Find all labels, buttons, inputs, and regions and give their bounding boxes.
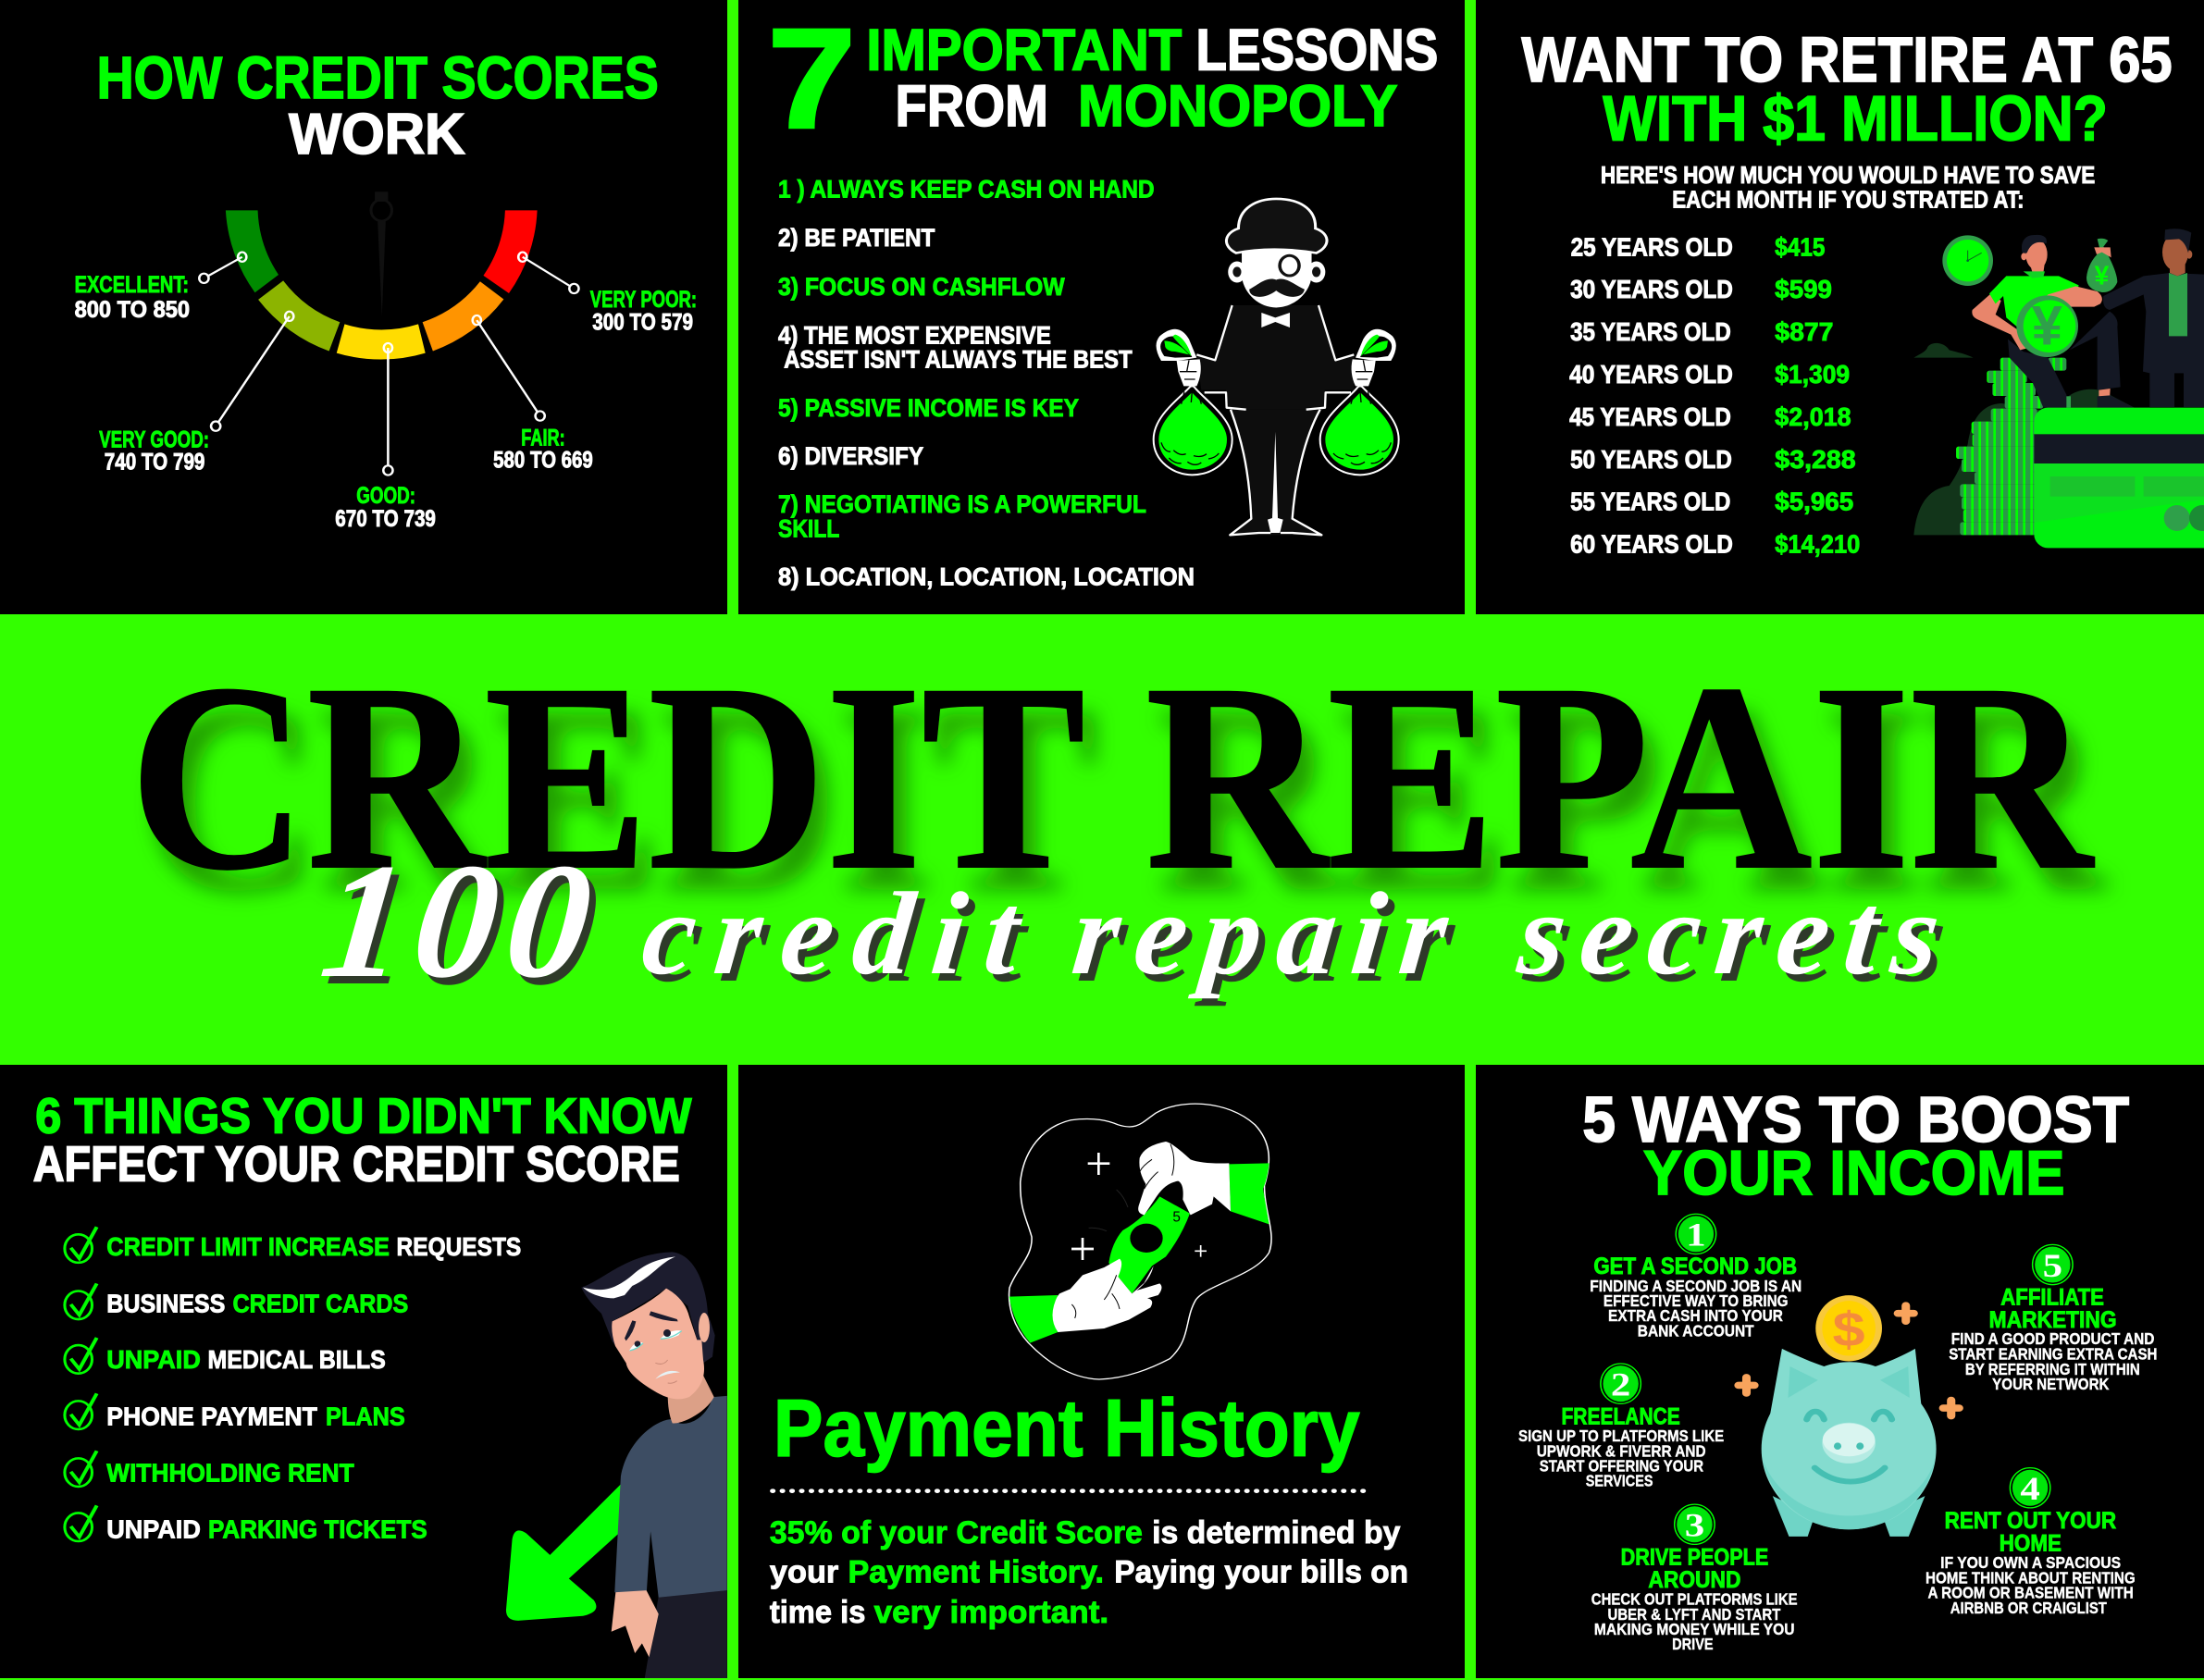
list: six items: UNPAID xyxy=(106,1346,201,1374)
list: six items: CREDIT LIMIT INCREASE xyxy=(106,1233,390,1262)
heading: 6 things you didn't know xyxy=(33,1087,692,1192)
subtitle: 100 credit repair secrets: secrets xyxy=(1518,875,1952,1007)
label: very poor xyxy=(590,286,697,335)
item 3: drive people around: DRIVE PEOPLE xyxy=(1621,1545,1768,1570)
icon: hands exchanging money xyxy=(1009,1142,1269,1343)
table: savings by starting age: 55 YEARS OLD xyxy=(1570,488,1730,516)
table: savings by starting age: $14,210 xyxy=(1775,531,1860,559)
label: good: GOOD: xyxy=(356,482,415,508)
heading: 7 important lessons from monopoly xyxy=(768,0,1438,157)
item 1: get a second job xyxy=(1590,1214,1802,1340)
label: fair: FAIR: xyxy=(521,425,565,451)
panel: payment history xyxy=(770,1104,1408,1629)
left man: ¥ xyxy=(2032,295,2063,357)
table: savings by starting age: $3,288 xyxy=(1775,446,1856,474)
heading: 7 important lessons from monopoly: MONOPOLY xyxy=(1078,73,1397,139)
yen coin xyxy=(2016,295,2078,357)
item 1: get a second job: 1 xyxy=(1686,1217,1706,1254)
sparkle plus signs xyxy=(1071,1153,1109,1260)
list: lessons: 3) FOCUS ON CASHFLOW xyxy=(778,274,1065,302)
background hills xyxy=(1913,343,2135,535)
gauge needle xyxy=(371,191,391,316)
list: lessons xyxy=(778,177,1195,591)
text block: time is xyxy=(770,1594,865,1629)
item 3: drive people around: CHECK OUT PLATFORMS LIKE xyxy=(1591,1590,1798,1609)
subtitle: 100 credit repair secrets: repair xyxy=(1067,868,1455,999)
banner: credit repair xyxy=(0,614,2204,1065)
orange plus signs xyxy=(1739,1305,1959,1416)
icon: sad man's head xyxy=(581,1252,715,1423)
item 3: drive people around: MAKING MONEY WHILE YOU xyxy=(1594,1621,1795,1639)
list: six items: WITHHOLDING RENT xyxy=(106,1459,354,1488)
panel: retire at 65 xyxy=(1522,24,2204,559)
item 4: rent out your home: RENT OUT YOUR xyxy=(1945,1508,2116,1533)
icon: hands exchanging money: 5 xyxy=(1172,1210,1181,1226)
item 4: rent out your home xyxy=(1925,1468,2136,1618)
item 4: rent out your home: IF YOU OWN A SPACIOUS xyxy=(1940,1553,2121,1572)
list: six items: PHONE PAYMENT xyxy=(106,1402,317,1431)
subheading xyxy=(1601,162,2095,213)
arrow: pointing down-left xyxy=(506,1484,623,1621)
heading: 7 important lessons from monopoly: IMPORTANT xyxy=(866,17,1182,82)
label: fair xyxy=(493,425,593,473)
heading: 5 ways to boost your income: YOUR INCOME xyxy=(1643,1137,2064,1208)
icon: piggy bank xyxy=(1739,1295,1959,1537)
table: savings by starting age: 45 YEARS OLD xyxy=(1569,403,1731,431)
list: six items: CREDIT CARDS xyxy=(233,1290,408,1318)
item 2: freelance xyxy=(1518,1364,1724,1490)
item 5: affiliate marketing xyxy=(1949,1244,2157,1394)
table: savings by starting age: 50 YEARS OLD xyxy=(1570,446,1732,474)
subtitle: 100 credit repair secrets: 100 xyxy=(314,829,600,1012)
label: very poor: 300 TO 579 xyxy=(592,309,693,335)
label: good: 670 TO 739 xyxy=(335,505,436,532)
heading: 7 important lessons from monopoly: LESSONS xyxy=(1196,17,1438,82)
text block: your xyxy=(770,1554,839,1589)
list: six items: REQUESTS xyxy=(397,1233,521,1262)
list: lessons: 7) NEGOTIATING IS A POWERFUL xyxy=(778,492,1146,519)
subtitle: 100 credit repair secrets: 100 xyxy=(320,836,606,1019)
item 2: freelance: SIGN UP TO PLATFORMS LIKE xyxy=(1518,1427,1724,1446)
table: savings by starting age: $415 xyxy=(1775,234,1825,262)
label: fair: 580 TO 669 xyxy=(493,447,593,473)
man's body xyxy=(612,1396,727,1680)
item 5: affiliate marketing: 5 xyxy=(2043,1247,2062,1284)
heading: 6 things you didn't know: 6 THINGS YOU DIDN'T KNOW xyxy=(35,1087,692,1143)
item 4: rent out your home: HOME xyxy=(2000,1531,2062,1556)
table: savings by starting age: $1,309 xyxy=(1775,361,1850,389)
text block: Paying your bills on xyxy=(1114,1554,1408,1589)
label: good xyxy=(335,482,436,532)
list: lessons: 6) DIVERSIFY xyxy=(778,443,923,470)
item 3: drive people around: DRIVE xyxy=(1672,1635,1714,1653)
panel: things that affect your credit score xyxy=(33,1087,727,1680)
left bag xyxy=(1157,329,1229,472)
text block: Payment History. xyxy=(848,1554,1104,1589)
trousers xyxy=(1229,410,1321,535)
item 1: get a second job: FINDING A SECOND JOB IS AN xyxy=(1590,1277,1802,1295)
gold coin: $ xyxy=(1833,1303,1865,1357)
left man xyxy=(1972,235,2135,408)
panel: how credit scores work xyxy=(75,44,697,532)
jacket xyxy=(1196,305,1354,410)
text block: very important. xyxy=(874,1594,1108,1629)
coin stacks xyxy=(1956,358,2066,535)
list: lessons: 4) THE MOST EXPENSIVE xyxy=(778,323,1051,350)
panel: ways to boost income xyxy=(1518,1084,2157,1653)
item 5: affiliate marketing: MARKETING xyxy=(1989,1307,2117,1332)
right man xyxy=(2103,229,2204,407)
label: very good xyxy=(99,426,209,475)
item 4: rent out your home: 4 xyxy=(2020,1470,2040,1507)
money bag: ¥ xyxy=(2094,261,2109,290)
item 5: affiliate marketing: YOUR NETWORK xyxy=(1992,1376,2109,1394)
label: very good: VERY GOOD: xyxy=(99,426,209,452)
list: lessons: 2) BE PATIENT xyxy=(778,226,935,253)
list: six items: PLANS xyxy=(326,1402,405,1431)
credit card xyxy=(2034,408,2204,548)
list: six items xyxy=(106,1233,521,1544)
chart: credit score gauge xyxy=(199,191,579,476)
list: six items: UNPAID xyxy=(106,1515,201,1544)
item 4: rent out your home: AIRBNB OR CRAIGLIST xyxy=(1950,1600,2107,1618)
head and hat xyxy=(1226,199,1327,307)
bow tie xyxy=(1261,313,1290,327)
list: lessons: 5) PASSIVE INCOME IS KEY xyxy=(778,395,1079,422)
list: six items: BUSINESS xyxy=(106,1290,225,1318)
table: savings by starting age: $599 xyxy=(1775,276,1832,303)
heading: 5 ways to boost your income xyxy=(1582,1084,2129,1208)
clock xyxy=(1942,235,1993,286)
label: very poor: VERY POOR: xyxy=(590,286,697,312)
text block: 35% of your Credit Score xyxy=(770,1514,1143,1550)
item 5: affiliate marketing: BY REFERRING IT WITHIN xyxy=(1965,1360,2140,1378)
title: how credit scores work xyxy=(97,44,659,166)
subtitle: 100 credit repair secrets: credit xyxy=(637,868,1028,999)
table: savings by starting age: $2,018 xyxy=(1775,403,1851,431)
subtitle: 100 credit repair secrets xyxy=(314,829,1952,1019)
subtitle: 100 credit repair secrets: credit xyxy=(643,875,1034,1007)
item 3: drive people around: 3 xyxy=(1685,1507,1704,1544)
table: savings by starting age: $877 xyxy=(1775,318,1833,346)
icon: monopoly man with money bags xyxy=(1157,199,1396,535)
subtitle: 100 credit repair secrets: secrets xyxy=(1512,868,1946,999)
panel: monopoly lessons xyxy=(768,0,1438,591)
subheading: EACH MONTH IF YOU STRATED AT: xyxy=(1672,186,2024,213)
money bag xyxy=(2086,239,2117,292)
item 3: drive people around xyxy=(1591,1504,1798,1653)
table: savings by starting age: 35 YEARS OLD xyxy=(1570,318,1731,346)
title: how credit scores work: WORK xyxy=(289,101,465,166)
label: excellent: EXCELLENT: xyxy=(75,272,189,298)
gold coin xyxy=(1815,1295,1882,1361)
right bag xyxy=(1323,329,1396,472)
item 1: get a second job: EXTRA CASH INTO YOUR xyxy=(1608,1307,1783,1326)
table: savings by starting age: 60 YEARS OLD xyxy=(1570,531,1733,559)
icon: men on coin stacks and credit card xyxy=(1913,229,2204,548)
heading: 6 things you didn't know: AFFECT YOUR CREDIT SCORE xyxy=(33,1136,680,1192)
item 2: freelance: START OFFERING YOUR xyxy=(1540,1457,1703,1476)
heading: want to retire at 65 xyxy=(1522,24,2173,154)
label: excellent xyxy=(75,272,190,323)
icons: check marks xyxy=(65,1227,97,1541)
leader lines xyxy=(199,253,579,476)
main title: CREDIT xyxy=(130,628,1085,925)
money hands outline xyxy=(1009,1104,1271,1379)
heading: 7 important lessons from monopoly: 7 xyxy=(768,0,856,157)
item 3: drive people around: UBER & LYFT AND START xyxy=(1607,1605,1780,1624)
label: very good: 740 TO 799 xyxy=(105,449,204,475)
list: six items: PARKING TICKETS xyxy=(208,1515,427,1544)
item 5: affiliate marketing: AFFILIATE xyxy=(2000,1284,2104,1310)
table: savings by starting age: $5,965 xyxy=(1775,488,1853,516)
item 2: freelance: SERVICES xyxy=(1586,1472,1653,1490)
main title: REPAIR xyxy=(1145,628,2095,925)
list: lessons: 8) LOCATION, LOCATION, LOCATION xyxy=(778,564,1195,591)
table: savings by starting age: 25 YEARS OLD xyxy=(1571,234,1733,262)
main title xyxy=(130,628,2095,925)
item 1: get a second job: EFFECTIVE WAY TO BRING xyxy=(1603,1292,1788,1311)
item 2: freelance: UPWORK & FIVERR AND xyxy=(1537,1442,1706,1461)
list: six items: MEDICAL BILLS xyxy=(207,1346,386,1374)
item 2: freelance: 2 xyxy=(1611,1366,1630,1403)
list: lessons: ASSET ISN'T ALWAYS THE BEST xyxy=(784,347,1133,374)
heading: 7 important lessons from monopoly: FROM xyxy=(896,73,1048,139)
list: lessons: 1 ) ALWAYS KEEP CASH ON HAND xyxy=(778,177,1155,204)
list: lessons: SKILL xyxy=(778,516,839,543)
subtitle: 100 credit repair secrets: repair xyxy=(1073,875,1461,1007)
label: excellent: 800 TO 850 xyxy=(75,296,190,323)
table: savings by starting age: 40 YEARS OLD xyxy=(1569,361,1733,389)
text block: is determined by xyxy=(1152,1514,1401,1550)
text block xyxy=(770,1514,1408,1629)
item 1: get a second job: BANK ACCOUNT xyxy=(1638,1322,1754,1340)
table: savings by starting age xyxy=(1569,234,1860,559)
heading: payment history: Payment History xyxy=(774,1384,1360,1473)
table: savings by starting age: 30 YEARS OLD xyxy=(1570,276,1733,303)
body and bags xyxy=(1157,305,1396,535)
item 3: drive people around: AROUND xyxy=(1648,1567,1740,1593)
item 1: get a second job: GET A SECOND JOB xyxy=(1593,1254,1797,1279)
item 2: freelance: FREELANCE xyxy=(1561,1404,1680,1429)
title: how credit scores work: HOW CREDIT SCORES xyxy=(97,44,659,111)
